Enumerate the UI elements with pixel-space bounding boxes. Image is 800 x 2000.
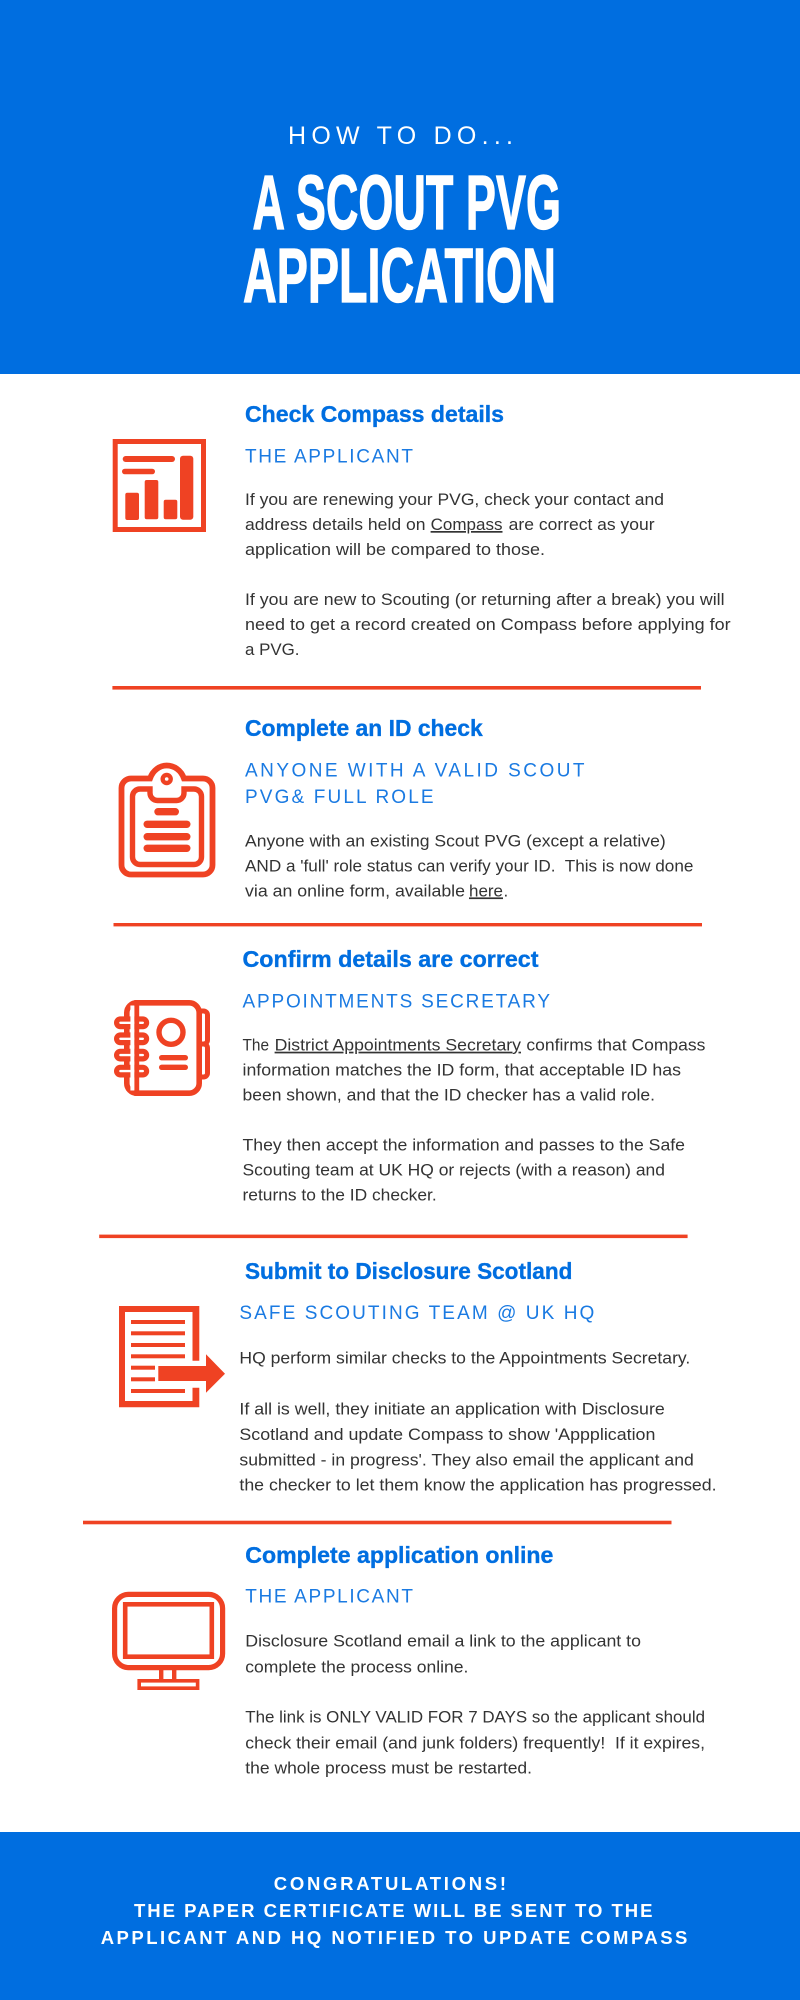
- body text: The: [242, 1036, 269, 1055]
- role: APPOINTMENTS SECRETARY: [242, 992, 550, 1012]
- body text: Scouting team at UK HQ or rejects (with a reason) and: [242, 1161, 665, 1180]
- title: [243, 160, 561, 319]
- icon: document with arrow: [119, 1306, 225, 1407]
- body text: application will be compared to those.: [245, 540, 545, 559]
- step 3: confirm details are correct: [117, 946, 705, 1205]
- heading: Confirm details are correct: [242, 946, 539, 972]
- body text: here: [469, 881, 503, 900]
- icon: address book: [117, 1000, 208, 1096]
- body text: Compass: [431, 515, 502, 534]
- icon: computer monitor: [115, 1594, 223, 1688]
- body text: via an online form, available: [245, 881, 465, 900]
- body text: District Appointments Secretary: [275, 1036, 522, 1055]
- role: PVG& FULL ROLE: [245, 787, 434, 808]
- body text: [245, 490, 731, 659]
- step 2: complete an ID check: [122, 715, 693, 900]
- body text: returns to the ID checker.: [242, 1186, 437, 1205]
- congratulations message: THE PAPER CERTIFICATE WILL BE SENT TO THE: [134, 1900, 652, 1921]
- heading: Complete application online: [245, 1542, 553, 1568]
- body text: a PVG.: [245, 640, 300, 659]
- icon: clipboard: [122, 766, 212, 874]
- body text: [245, 831, 693, 900]
- body text: If all is well, they initiate an application with Disclosure: [239, 1399, 665, 1418]
- step 1: check Compass details: [115, 401, 731, 659]
- title: A SCOUT PVG: [252, 160, 561, 246]
- body text: need to get a record created on Compass before applying for: [245, 615, 731, 634]
- congratulations message: APPLICANT AND HQ NOTIFIED TO UPDATE COMPASS: [101, 1927, 687, 1948]
- role: SAFE SCOUTING TEAM @ UK HQ: [239, 1303, 594, 1324]
- kicker: how to do: HOW TO DO...: [288, 122, 513, 150]
- body text: information matches the ID form, that acceptable ID has: [242, 1061, 681, 1080]
- body text: The link is ONLY VALID FOR 7 DAYS so the applicant should: [245, 1707, 705, 1726]
- body text: HQ perform similar checks to the Appointments Secretary.: [239, 1348, 690, 1367]
- header banner: [0, 0, 800, 374]
- heading: Complete an ID check: [245, 715, 483, 741]
- body text: Anyone with an existing Scout PVG (except a relative): [245, 831, 666, 850]
- step 5: complete application online: [115, 1542, 705, 1777]
- body text: the checker to let them know the application has progressed.: [239, 1475, 717, 1494]
- congratulations message: [101, 1873, 687, 1948]
- icon: bar chart report: [115, 442, 204, 530]
- body text: If you are renewing your PVG, check your contact and: [245, 490, 664, 509]
- body text: Scotland and update Compass to show 'Appplication: [239, 1425, 655, 1444]
- body text: are correct as your: [509, 515, 655, 534]
- role: THE APPLICANT: [245, 1586, 413, 1607]
- body text: [245, 1632, 705, 1777]
- title: APPLICATION: [243, 233, 556, 319]
- body text: check their email (and junk folders) frequently! If it expires,: [245, 1733, 705, 1752]
- body text: confirms that Compass: [526, 1036, 705, 1055]
- body text: .: [504, 881, 508, 900]
- body text: [242, 1036, 705, 1205]
- body text: been shown, and that the ID checker has a valid role.: [242, 1086, 655, 1105]
- step 4: submit to Disclosure Scotland: [119, 1258, 717, 1494]
- body text: address details held on: [245, 515, 426, 534]
- footer banner: [0, 1832, 800, 2000]
- heading: Check Compass details: [245, 401, 504, 427]
- body text: the whole process must be restarted.: [245, 1758, 532, 1777]
- role: THE APPLICANT: [245, 446, 413, 468]
- body text: AND a 'full' role status can verify your ID. This is now done: [245, 856, 693, 875]
- role: ANYONE WITH A VALID SCOUT: [245, 760, 585, 781]
- body text: They then accept the information and passes to the Safe: [242, 1136, 685, 1155]
- congratulations message: CONGRATULATIONS!: [274, 1873, 506, 1894]
- body text: If you are new to Scouting (or returning after a break) you will: [245, 590, 724, 609]
- body text: complete the process online.: [245, 1657, 468, 1676]
- body text: Disclosure Scotland email a link to the applicant to: [245, 1632, 641, 1651]
- role: [245, 760, 585, 808]
- body text: submitted - in progress'. They also email the applicant and: [239, 1450, 694, 1469]
- body text: [239, 1348, 717, 1494]
- heading: Submit to Disclosure Scotland: [245, 1258, 572, 1284]
